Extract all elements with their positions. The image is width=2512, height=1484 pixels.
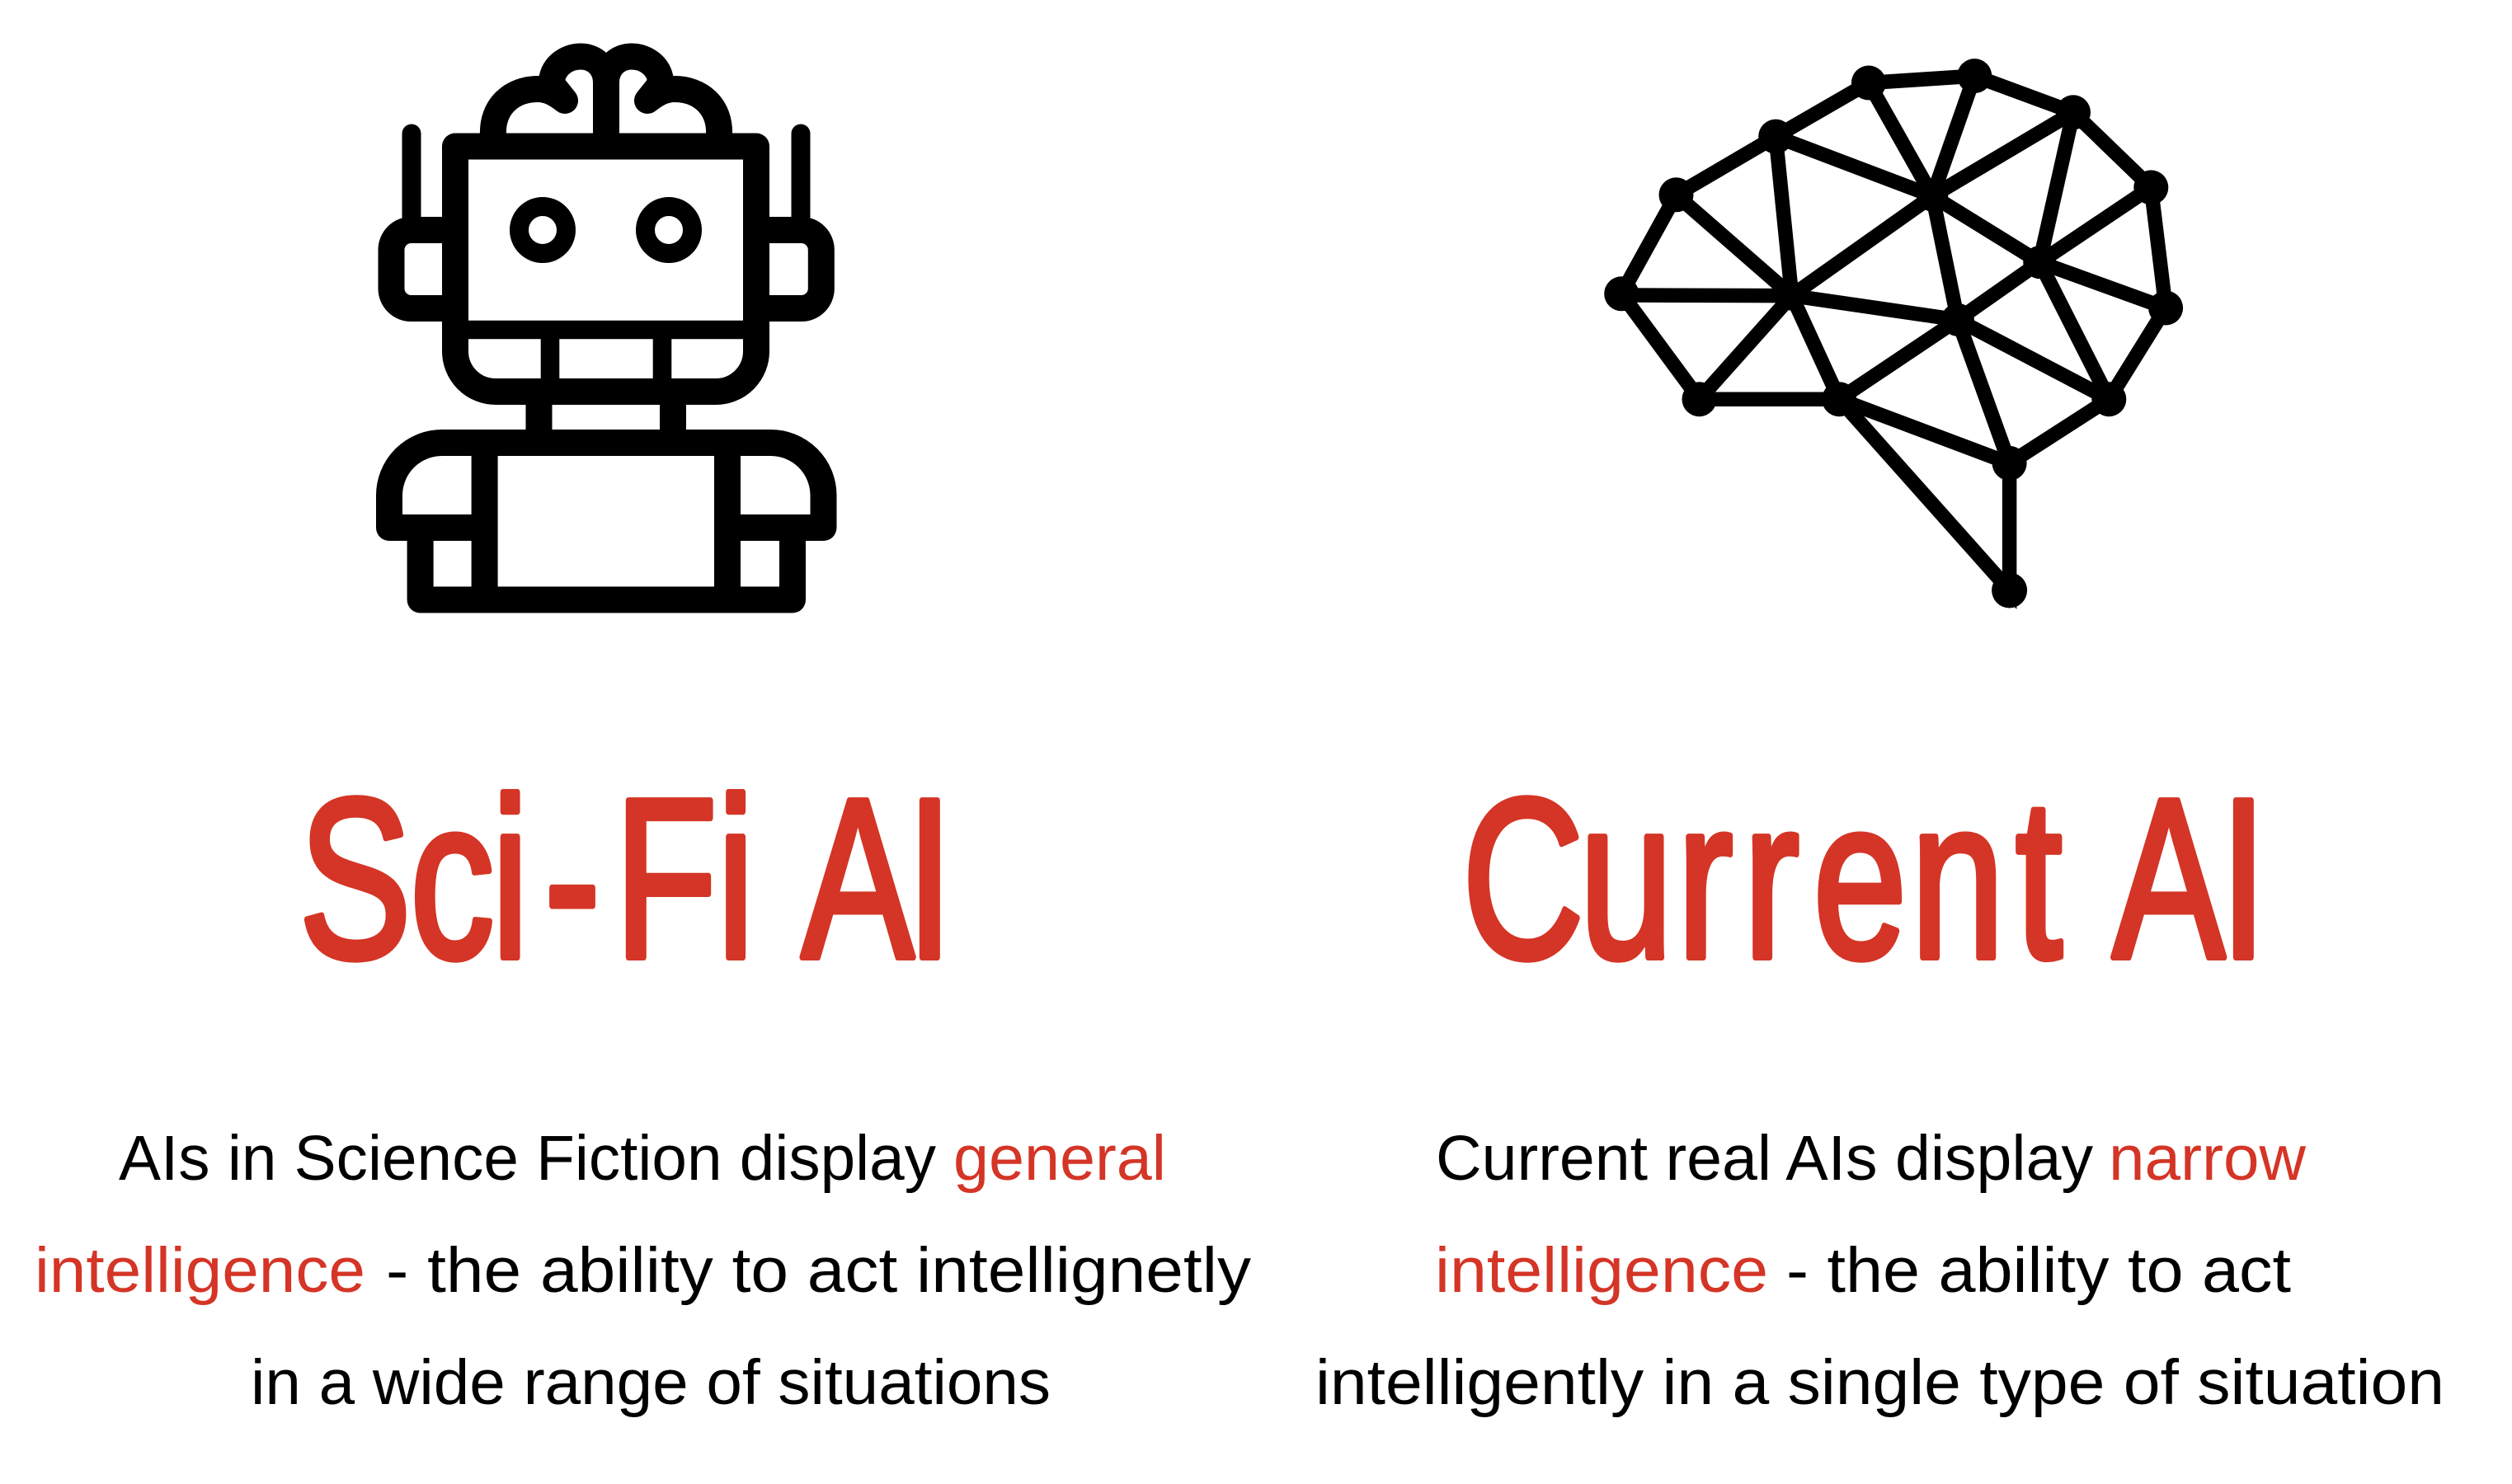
heading: Sci-Fi AI: Sci-Fi AI (299, 752, 953, 1006)
brain connections (1621, 76, 2166, 590)
robot antennas (412, 134, 801, 227)
text block: Sci-Fi AI description: general (953, 1123, 1166, 1194)
panel: Current AI (1315, 59, 2444, 1418)
robot ears (391, 230, 821, 308)
text block: Current AI description: intelligence (1435, 1235, 1768, 1306)
robot brain left half (493, 56, 606, 140)
icon: robot with brain (389, 56, 823, 600)
text block: Current AI description: intelligently in a single type of situation (1315, 1347, 2444, 1418)
icon: neural network brain (1604, 59, 2183, 608)
robot head (455, 147, 756, 392)
text block: Current AI description: Current real AIs display (1436, 1123, 2093, 1194)
text block: Sci-Fi AI description: AIs in Science Fiction display (119, 1123, 936, 1194)
robot jaw bar and teeth (455, 330, 756, 392)
text block: Current AI description (1315, 1123, 2444, 1418)
text block: Current AI description: - the ability to act (1786, 1235, 2291, 1306)
brain nodes (1604, 59, 2183, 608)
text block: Sci-Fi AI description: in a wide range of situations (251, 1347, 1051, 1418)
robot body (389, 443, 823, 600)
heading: Current AI: Current AI (1462, 752, 2267, 1006)
robot eyes (520, 206, 693, 254)
text block: Sci-Fi AI description (35, 1123, 1252, 1418)
robot neck (539, 402, 673, 434)
text block: Sci-Fi AI description: intelligence (35, 1235, 365, 1306)
panel: Sci-Fi AI (35, 56, 1252, 1418)
text block: Sci-Fi AI description: - the ability to act intellignetly (386, 1235, 1252, 1306)
robot brain right half (606, 56, 719, 140)
text block: Current AI description: narrow (2109, 1123, 2306, 1194)
